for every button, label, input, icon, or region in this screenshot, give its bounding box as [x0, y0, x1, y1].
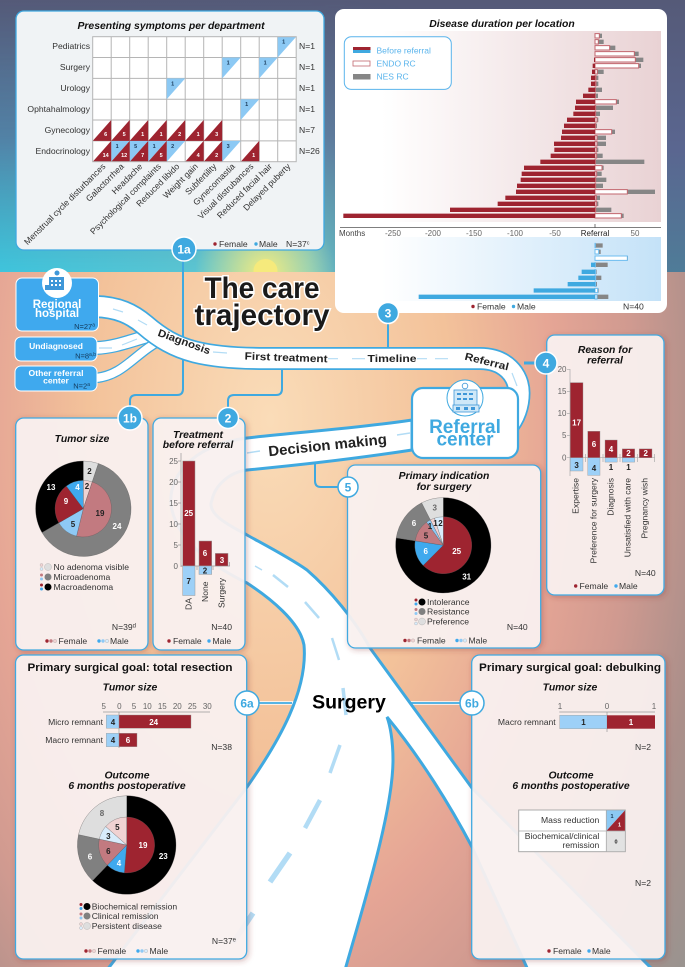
outcome table: 1	[610, 814, 614, 820]
heading: Tumor size	[55, 434, 110, 445]
connector: referral to 4	[524, 362, 538, 364]
legend: Male	[259, 239, 278, 249]
donut chart: tumor size: 5	[71, 520, 76, 529]
outcome table	[519, 810, 625, 852]
bar chart: treatment: 25	[184, 509, 194, 518]
bar chart: reasons: 20	[558, 365, 567, 374]
heat table: 1	[252, 153, 255, 159]
heat table: 14	[103, 153, 110, 159]
bar chart: reasons: Diagnosis	[606, 478, 616, 516]
legend: Male	[619, 581, 638, 591]
donut chart: tumor size: 24	[113, 522, 122, 531]
heat table: 3	[227, 144, 230, 150]
sample size: N=38	[211, 742, 232, 752]
subheading: outcome	[68, 771, 186, 792]
donut chart: outcome: 8	[100, 809, 105, 818]
axis	[339, 224, 661, 238]
bar chart: reasons: 2	[643, 449, 648, 458]
heading: Primary surgical goal: debulking	[479, 662, 661, 674]
symptom labels	[22, 161, 293, 247]
legend: N=40	[623, 302, 644, 312]
legend: gender: Female	[98, 946, 126, 956]
badge 3: 3	[385, 306, 392, 320]
bar chart: remnant: 15	[158, 702, 167, 711]
legend: gender: Male	[110, 636, 129, 646]
heading: Disease duration per location	[429, 19, 575, 30]
panel: regional hospital: N=27	[74, 322, 92, 331]
icon: hospital	[42, 268, 72, 298]
department labels: Endocrinology	[36, 146, 91, 156]
bar chart: remnant: Macro remnant	[45, 735, 104, 745]
bar chart: reasons	[558, 365, 655, 564]
sample size: e	[233, 938, 237, 944]
bar chart: reasons: Expertise	[570, 478, 580, 514]
heading	[578, 345, 633, 366]
bar chart: reasons: 1	[626, 463, 631, 472]
road: other referral center	[96, 338, 165, 378]
badge 1a: 1a	[177, 242, 191, 256]
legend: Female	[477, 302, 506, 312]
heat table: 1	[197, 132, 200, 138]
badge 5	[338, 477, 358, 497]
connector line 6b	[410, 702, 464, 704]
badge 2	[218, 408, 238, 428]
legend: indication categories	[414, 597, 470, 626]
legend: Female	[219, 239, 248, 249]
title: The care	[204, 272, 320, 305]
bar chart: remnant: 20	[173, 702, 182, 711]
bar chart: treatment: 7	[186, 577, 191, 586]
bar chart: reasons: Pregnancy wish	[640, 478, 650, 539]
bar chart: remnant: Macro remnant	[498, 717, 556, 727]
donut chart: tumor size: 4	[75, 483, 80, 492]
legend: gender	[84, 946, 168, 956]
panel 5: primary indication for surgery	[348, 465, 541, 648]
title: trajectory	[194, 299, 330, 332]
bar chart: reasons: 17	[572, 418, 582, 428]
bar chart: treatment: 5	[174, 541, 179, 550]
heading: Presenting symptoms per department	[77, 21, 265, 32]
panel 3: disease duration per location	[335, 9, 667, 313]
legend: gender: Male	[468, 636, 487, 646]
heat table: 5	[123, 132, 126, 138]
legend: outcome categories: Biochemical remission	[92, 902, 177, 912]
panel 1a: presenting symptoms per department	[16, 11, 324, 250]
bar chart: reasons: Unsatisfied with care	[622, 478, 632, 557]
heat table: 2	[171, 144, 174, 150]
donut chart: outcome: 19	[139, 841, 148, 850]
heat table: 2	[178, 132, 181, 138]
subheading: tumor size: Tumor size	[543, 682, 598, 694]
heat table: 12	[121, 153, 127, 159]
donut chart: tumor size	[36, 461, 131, 556]
heat table: 2	[215, 153, 218, 159]
bar chart: remnant: Micro remnant	[48, 717, 104, 727]
legend	[213, 239, 310, 249]
legend: Female	[553, 946, 582, 956]
panel: other referral center: a	[87, 382, 90, 388]
heat table: 1	[153, 144, 156, 150]
sample size: N=2	[635, 878, 651, 888]
donut chart: outcome: 6	[88, 852, 93, 862]
legend: indication categories: Intolerance	[427, 597, 470, 607]
bar chart: reasons: Preference for surgery	[588, 477, 598, 564]
department totals	[299, 41, 320, 156]
legend: gender: Male	[150, 946, 168, 956]
panel: referral center	[412, 380, 518, 458]
symptom labels: Reduced libido	[134, 161, 182, 209]
axis: -250	[385, 229, 402, 238]
badge 6a: 6a	[240, 696, 254, 710]
department totals: N=1	[299, 41, 315, 51]
symptom labels: Weight gain	[161, 161, 200, 200]
heat table: 3	[215, 132, 218, 138]
heat table	[93, 37, 296, 162]
legend: Male	[592, 946, 611, 956]
subheading: outcome: 6 months postoperative	[68, 781, 186, 792]
road: undiagnosed	[96, 332, 165, 348]
panel: regional hospital	[16, 268, 98, 331]
connector: timeline to 3	[387, 320, 389, 350]
sample size: N=37	[212, 936, 233, 946]
heading: referral	[587, 356, 624, 366]
road label: First treatment: First treatment	[244, 351, 328, 365]
legend: gender: Female	[417, 636, 446, 646]
panel: other referral center: N=2	[73, 382, 87, 390]
axis: -150	[466, 229, 483, 238]
donut chart: outcome	[77, 796, 176, 894]
subheading: outcome	[512, 771, 630, 792]
heading: before referral	[163, 440, 234, 451]
connector: first treatment to 2	[228, 365, 282, 410]
legend: gender: Female	[58, 636, 87, 646]
donut chart: indication: 1	[433, 519, 438, 528]
symptom labels: Headache	[110, 161, 145, 196]
subheading: tumor size: Tumor size	[103, 682, 158, 694]
legend box: Before referral	[376, 46, 431, 56]
department totals: N=1	[299, 104, 315, 114]
legend: gender	[45, 636, 129, 646]
panel: undiagnosed	[15, 337, 97, 361]
outcome table: Biochemical/clinical	[525, 831, 599, 841]
axis: -100	[507, 229, 524, 238]
legend: tumor categories: Microadenoma	[54, 572, 111, 582]
connector: 1a to 1b	[130, 258, 183, 410]
donut chart: tumor size: 2	[85, 482, 90, 491]
title	[194, 272, 330, 332]
connector: surgery to 6b	[405, 701, 464, 705]
panel: referral center: center	[436, 430, 494, 450]
bar chart: remnant: 0	[605, 702, 610, 711]
background: landscape	[0, 272, 685, 967]
heading: Treatment	[173, 430, 224, 441]
donut chart: indication: 31	[462, 572, 472, 582]
bar chart: reasons: 6	[592, 440, 597, 449]
symptom labels: Visual distrubances	[196, 161, 255, 221]
legend: Male	[212, 636, 231, 646]
panel: other referral center: center	[43, 376, 70, 386]
panel 6b: debulking	[472, 655, 665, 959]
badge 5: 5	[345, 480, 352, 494]
sample size: N=40	[211, 622, 232, 632]
axis: 50	[631, 229, 640, 238]
bar chart: remnant: 25	[188, 702, 197, 711]
bar chart: treatment: DA	[184, 598, 194, 610]
bar chart: remnant: 4	[111, 718, 116, 727]
department labels	[27, 41, 91, 156]
heat table: 7	[141, 153, 144, 159]
legend: indication categories: Resistance	[427, 606, 470, 616]
icon: sun on the horizon	[254, 259, 278, 283]
panel: regional hospital: hospital	[35, 308, 79, 320]
panel: undiagnosed: N=8	[75, 352, 89, 360]
road label: Diagnosis: Diagnosis	[156, 327, 212, 357]
symptom labels: Menstrual cycle disturbances	[22, 161, 107, 247]
heading: Reason for	[578, 345, 633, 356]
donut chart: indication: 5	[424, 532, 429, 540]
legend: gender	[403, 636, 487, 646]
donut chart: outcome: 4	[117, 859, 122, 868]
legend: tumor categories: No adenoma visible	[54, 562, 129, 572]
legend: outcome categories	[80, 902, 177, 931]
badge 2: 2	[225, 412, 232, 426]
symptom labels: Psychological complaints	[88, 161, 163, 236]
outcome table: 0	[614, 840, 618, 846]
department totals: N=1	[299, 83, 315, 93]
donut chart: indication	[396, 498, 491, 593]
bar chart: remnant: 6	[126, 736, 131, 745]
department labels: Urology	[60, 83, 91, 93]
panel 2: treatment before referral	[153, 418, 245, 650]
bar chart: remnant: 30	[203, 702, 212, 711]
bar chart: reasons: 10	[558, 409, 567, 418]
legend: c	[307, 240, 310, 246]
axis: -50	[549, 229, 561, 238]
heat table: 4	[197, 153, 201, 159]
symptom labels: Gynecomastia	[191, 161, 237, 207]
sample size: N=40	[635, 568, 656, 578]
road: main care trajectory	[95, 306, 519, 428]
bar chart: remnant: 0	[117, 702, 122, 711]
heat table: 1	[116, 144, 119, 150]
axis: -200	[425, 229, 442, 238]
heading: for surgery	[417, 482, 473, 493]
heading: Primary surgical goal: total resection	[28, 662, 233, 674]
legend: Male	[517, 302, 536, 312]
panel: regional hospital: Regional	[33, 299, 81, 311]
sample size: N=39	[112, 622, 133, 632]
donut chart: indication: 2	[438, 519, 443, 528]
donut chart: tumor size: 13	[47, 483, 56, 492]
legend: indication categories: Preference	[427, 616, 469, 626]
bar chart: reasons: 2	[626, 449, 631, 458]
donut chart: indication: 6	[412, 519, 417, 528]
donut chart: indication: 6	[423, 547, 428, 556]
department labels: Pediatrics	[52, 41, 90, 51]
bar chart: reasons: 4	[592, 464, 597, 473]
department labels: Surgery	[60, 62, 91, 72]
legend: tumor categories	[40, 562, 129, 592]
heat table: 5	[134, 144, 137, 150]
bar chart: remnant: 5	[101, 702, 106, 711]
symptom labels: Reduced facial hair	[215, 161, 274, 220]
bar chart: reasons: 0	[562, 454, 567, 462]
donut chart: indication: 3	[432, 504, 437, 512]
donut chart: indication: 1	[428, 522, 433, 531]
road label: Decision making: Decision making	[268, 432, 388, 460]
donut chart: tumor size: 2	[87, 467, 92, 476]
badge 1a	[172, 237, 196, 261]
donut chart: outcome: 5	[115, 823, 120, 832]
heat table: 1	[227, 60, 230, 66]
legend: Female	[580, 581, 608, 591]
panel: undiagnosed: Undiagnosed	[29, 341, 83, 351]
connector: decision making to 5	[315, 455, 340, 487]
icon: referral center building	[447, 380, 483, 416]
road label: Timeline: Timeline	[368, 353, 417, 365]
panel: referral center: Referral	[429, 417, 501, 438]
outcome table: remission	[563, 840, 600, 850]
legend	[471, 302, 644, 312]
badge 1b	[118, 406, 142, 430]
donut chart: outcome: 3	[106, 832, 111, 841]
panel: undiagnosed: a,b	[89, 352, 96, 358]
legend: Female	[173, 636, 202, 646]
heat table: 1	[171, 81, 174, 87]
bar chart: remnant: 5	[132, 702, 137, 711]
subheading: outcome: Outcome	[104, 771, 150, 782]
outcome table: 1	[618, 822, 621, 828]
bar chart: treatment: 25	[169, 457, 179, 466]
road: decision making to surgery	[107, 420, 653, 967]
bar chart: remnant	[45, 702, 212, 748]
sample size: N=40	[507, 622, 528, 632]
legend	[167, 636, 231, 646]
department totals: N=26	[299, 146, 320, 156]
donut chart: tumor size: 9	[64, 497, 69, 506]
subheading: outcome: 6 months postoperative	[512, 781, 630, 792]
heading	[163, 430, 234, 451]
bar chart: remnant: 4	[111, 736, 116, 745]
bar chart: treatment: 6	[203, 549, 208, 558]
badge 4	[535, 352, 557, 374]
bar chart: reasons: 4	[609, 445, 614, 454]
road label: Surgery: Surgery	[312, 692, 386, 714]
badge 1b: 1b	[123, 412, 137, 426]
connector line 6a	[256, 702, 292, 704]
department labels: Gynecology	[45, 125, 91, 135]
heat table: 1	[141, 132, 144, 138]
legend: N=37	[286, 239, 307, 249]
road label: Referral: Referral	[463, 351, 510, 373]
bar chart: reasons: 1	[609, 463, 614, 472]
badge 6b: 6b	[465, 696, 479, 710]
legend box: ENDO RC	[376, 58, 416, 68]
badge 3	[378, 302, 398, 324]
bar chart: remnant: 1	[652, 702, 657, 711]
donut chart: outcome: 6	[106, 847, 111, 856]
heat table: 1	[160, 132, 163, 138]
legend	[547, 946, 611, 956]
heat table: 1	[264, 60, 267, 66]
bar chart: treatment: Surgery	[216, 577, 226, 608]
legend	[574, 581, 638, 591]
bar chart: duration per patient	[343, 34, 655, 299]
badge 6b	[460, 691, 484, 715]
heat table: 5	[160, 153, 163, 159]
heat table: 6	[104, 132, 107, 138]
department labels: Ophtahalmology	[27, 104, 91, 114]
panel 4: reason for referral	[547, 335, 664, 595]
male band	[340, 237, 661, 301]
symptom labels: Delayed puberty	[241, 161, 293, 213]
department totals: N=1	[299, 62, 315, 72]
outcome table: Mass reduction	[541, 815, 600, 825]
bar chart: reasons: 15	[558, 387, 567, 396]
heading: Primary indication	[399, 471, 489, 482]
connector: surgery to 6a	[256, 701, 296, 705]
bar chart: remnant: 24	[149, 718, 159, 727]
bar chart: remnant: 1	[581, 718, 586, 727]
legend: outcome categories: Clinical remission	[92, 911, 159, 921]
bar chart: treatment	[169, 453, 230, 610]
heat table: 1	[282, 40, 285, 46]
symptom labels: Galactorrhea	[84, 161, 126, 204]
axis: Months	[339, 229, 365, 238]
background: sky	[0, 0, 685, 272]
bar chart: treatment: 0	[174, 562, 179, 571]
symptom labels: Subfertility	[183, 161, 219, 197]
department totals: N=7	[299, 125, 315, 135]
legend: tumor categories: Macroadenoma	[54, 582, 113, 592]
badge 4: 4	[543, 356, 550, 370]
panel: other referral center	[15, 366, 97, 391]
donut chart: indication: 25	[452, 547, 462, 556]
panel: other referral center: Other referral	[29, 368, 83, 378]
legend: outcome categories: Persistent disease	[92, 921, 162, 931]
legend box	[344, 37, 451, 89]
bar chart: remnant: 10	[143, 702, 152, 711]
subheading: outcome: Outcome	[548, 771, 594, 782]
heading	[399, 471, 489, 493]
panel 6a: total resection	[16, 655, 247, 959]
bar chart: treatment: 2	[203, 566, 208, 576]
bar chart: treatment: None	[200, 581, 210, 602]
donut chart: tumor size: 19	[96, 509, 105, 518]
axis: Referral	[581, 229, 609, 238]
bar chart: treatment: 20	[169, 478, 179, 487]
panel: regional hospital: a	[92, 322, 95, 328]
sample size: N=2	[635, 742, 651, 752]
panel 1b: tumor size	[16, 418, 148, 650]
badge 6a	[235, 691, 259, 715]
heat table: 1	[245, 102, 248, 108]
bar chart: treatment: 3	[220, 556, 225, 565]
bar chart: reasons: 5	[562, 431, 567, 440]
bar chart: remnant: 1	[629, 718, 634, 727]
legend box: NES RC	[376, 72, 409, 82]
bar chart: treatment: 10	[169, 520, 179, 529]
sample size: d	[133, 624, 136, 630]
bar chart: remnant: 1	[558, 702, 563, 711]
bar chart: treatment: 15	[169, 499, 179, 508]
bar chart: reasons: 3	[574, 461, 579, 470]
donut chart: outcome: 23	[159, 852, 168, 861]
bar chart: remnant	[498, 702, 657, 732]
female band	[340, 31, 661, 222]
